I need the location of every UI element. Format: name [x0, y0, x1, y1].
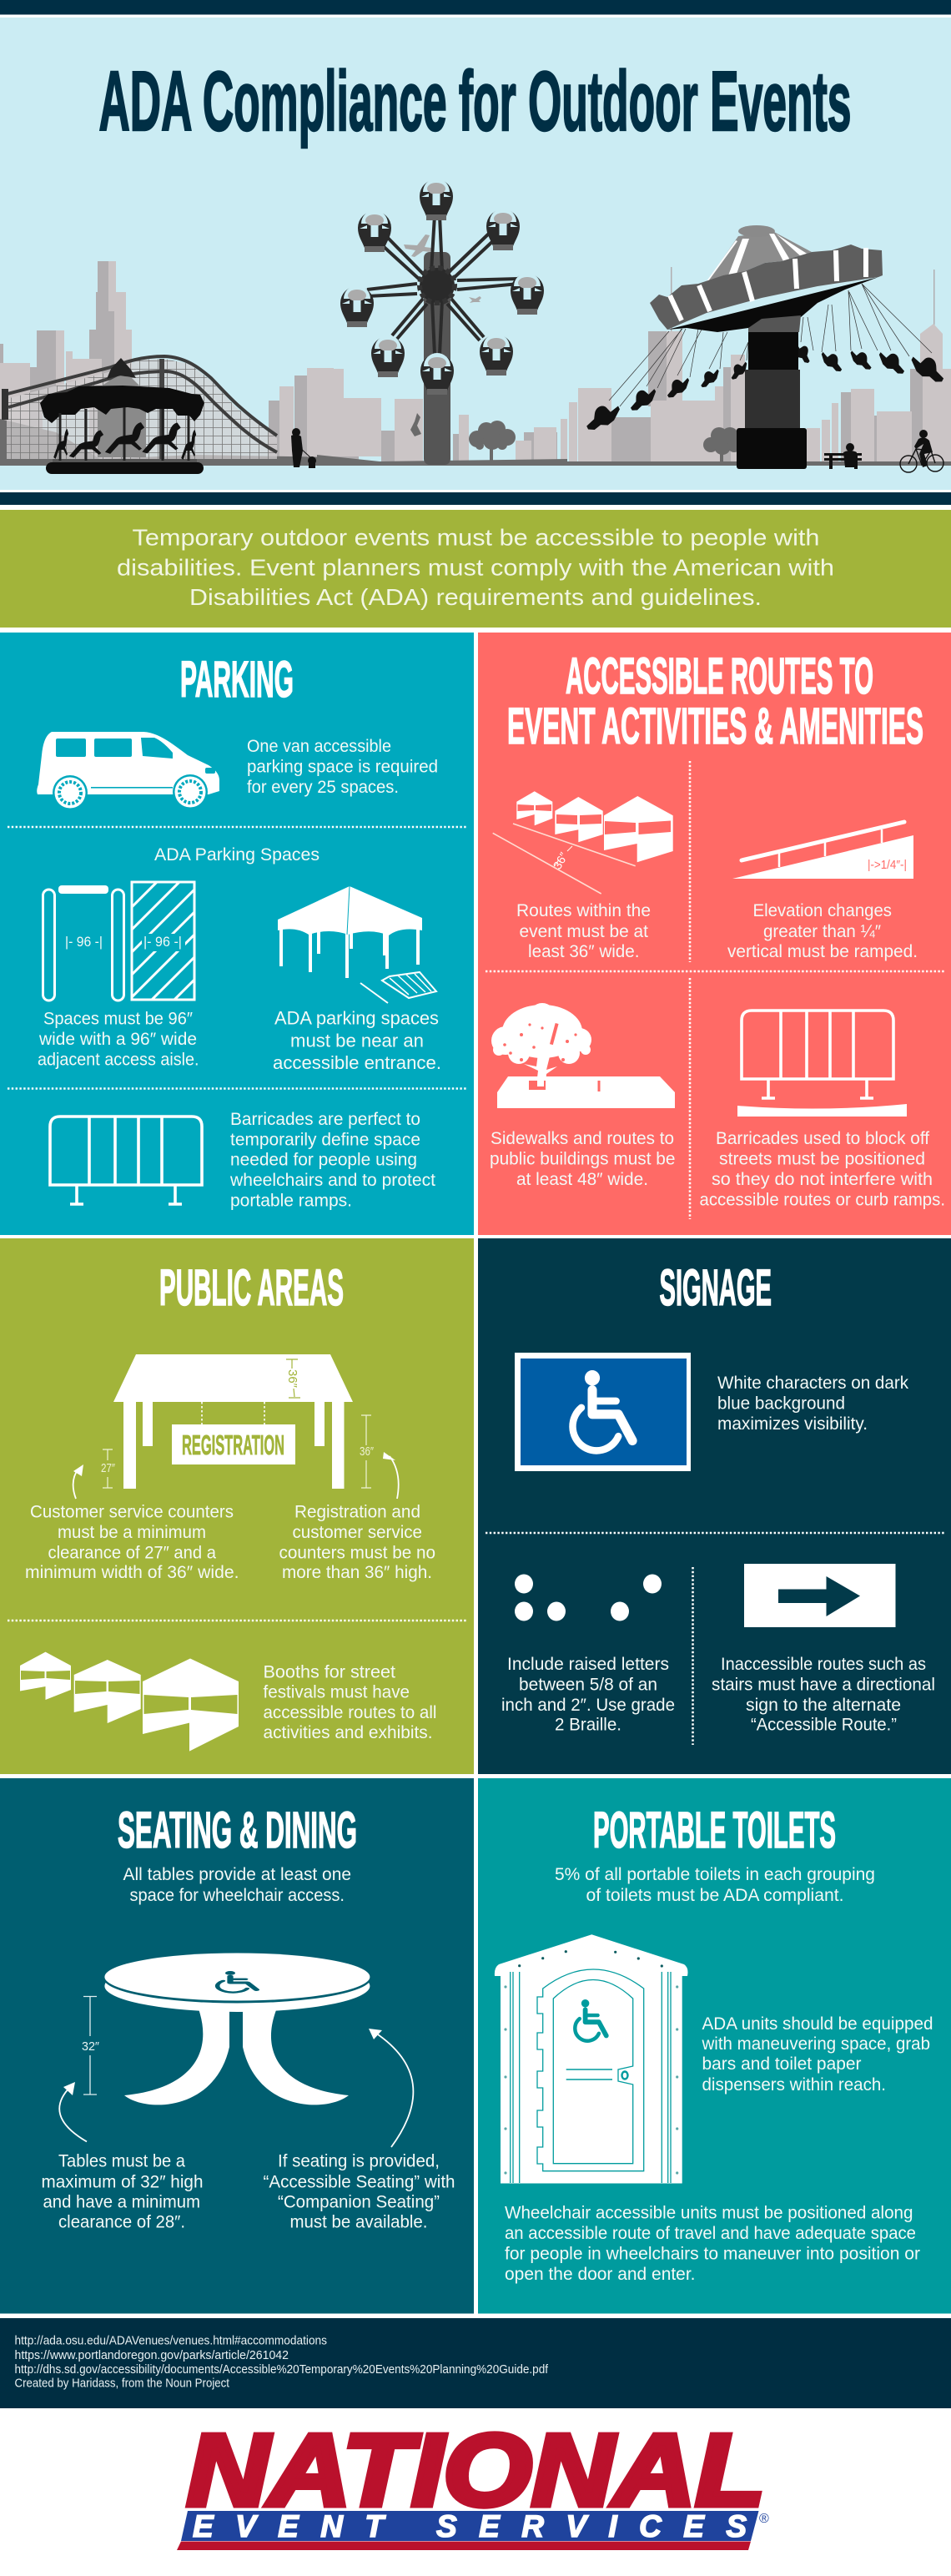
text: inaccessible routes: stairs must have a directional — [712, 1676, 935, 1694]
arrow: table height — [59, 2082, 87, 2141]
icon: portable toilet — [495, 1934, 687, 2183]
text: spaces width — [38, 1010, 199, 1070]
text: source links: http://dhs.sd.gov/accessibility/documents/Accessible%20Temporary%20Events%20Planning%20Guide.pdf — [15, 2363, 549, 2377]
text: accessible seating: “Companion Seating” — [278, 2193, 440, 2211]
text: wheelchair accessible units: open the door and enter. — [505, 2265, 696, 2284]
text: accessible seating: If seating is provided, — [278, 2151, 440, 2171]
text: raised letters: between 5/8 of an — [519, 1676, 657, 1694]
icon: parking space diagram — [42, 881, 195, 1001]
text: table height: clearance of 28″. — [58, 2213, 185, 2231]
icon: tents on route: 36″ — [551, 850, 571, 871]
plane silhouettes — [404, 234, 481, 303]
text: source links: http://ada.osu.edu/ADAVenues/venues.html#accommodations — [15, 2335, 327, 2348]
ferris wheel ride — [340, 179, 544, 465]
icon: registration counter: 36″ — [285, 1369, 299, 1389]
icon: registration counter: 36″ — [360, 1444, 375, 1459]
panel: public areas: PUBLIC AREAS — [159, 1259, 344, 1316]
panel: seating and dining — [0, 1778, 474, 2313]
icon: braille dots — [515, 1574, 662, 1621]
text: registration counters: Registration and — [294, 1502, 420, 1522]
text: inaccessible routes: “Accessible Route.” — [751, 1716, 897, 1734]
panel: parking — [0, 633, 474, 1235]
text: table height: Tables must be a — [58, 2151, 185, 2171]
text: ada units — [702, 2014, 933, 2095]
icon: barricade on curb — [737, 1011, 907, 1117]
text: ada units: bars and toilet paper — [702, 2054, 861, 2074]
icon: accessible parking sign — [515, 1353, 691, 1471]
text: spaces width: wide with a 96″ wide — [38, 1030, 197, 1049]
text: near entrance: must be near an — [290, 1030, 424, 1051]
panel: signage: SIGNAGE — [659, 1259, 772, 1316]
text: barricades block streets: Barricades used to block off — [716, 1129, 929, 1148]
text: elevation: greater than ¼″ — [763, 922, 882, 941]
person on bench — [824, 443, 862, 469]
icon: round table — [103, 1953, 370, 2105]
icon: ramp — [732, 822, 913, 879]
text: booths: activities and exhibits. — [264, 1723, 432, 1742]
text: accessible seating — [264, 2151, 455, 2231]
text: customer counters: must be a minimum — [58, 1523, 206, 1542]
text: inaccessible routes: sign to the alternate — [746, 1696, 901, 1715]
navy divider bar — [0, 492, 951, 505]
panel: sources footer — [0, 2318, 951, 2408]
panel: intro — [0, 510, 951, 628]
text: wheelchair access: space for wheelchair access. — [130, 1886, 345, 1905]
text: sidewalks: at least 48″ wide. — [516, 1170, 648, 1189]
icon: ramp: |->1/4″-| — [868, 858, 907, 872]
text: registration counters: customer service — [292, 1523, 422, 1542]
panel: hero sky scene — [0, 18, 951, 490]
logo: national event services: EVENT SERVICES — [193, 2509, 747, 2543]
carousel — [40, 358, 204, 474]
text: barricades block streets: streets must be positioned — [719, 1150, 925, 1168]
dimension: 32 inch: 32″ — [82, 2039, 100, 2054]
logo: national event services: NATIONAL — [187, 2413, 765, 2527]
text: routes width: Routes within the — [516, 901, 651, 920]
icon: tents on route — [493, 791, 673, 894]
intro text: disabilities. Event planners must comply with the American with — [117, 554, 834, 581]
text: elevation: vertical must be ramped. — [727, 942, 918, 961]
icon: barricade — [50, 1117, 202, 1204]
text: customer counters: clearance of 27″ and a — [48, 1544, 216, 1562]
panel: public areas — [0, 1238, 474, 1774]
text: barricades: temporarily define space — [230, 1130, 420, 1150]
text: five percent: of toilets must be ADA compliant. — [586, 1886, 844, 1905]
swing carousel — [583, 225, 948, 469]
logo: national event services: ® — [759, 2512, 769, 2526]
panel: parking: PARKING — [180, 651, 294, 708]
text: wheelchair access — [123, 1865, 351, 1905]
text: customer counters — [25, 1502, 239, 1582]
panel: accessible routes — [478, 633, 951, 1235]
text: ada units: ADA units should be equipped — [702, 2014, 933, 2034]
intro text — [117, 524, 834, 610]
text: raised letters: Include raised letters — [507, 1655, 669, 1674]
text: wheelchair accessible units: Wheelchair accessible units must be positioned along — [505, 2203, 913, 2223]
text: inaccessible routes: Inaccessible routes such as — [721, 1655, 926, 1674]
text: sidewalks: public buildings must be — [490, 1150, 676, 1168]
text: routes width — [516, 901, 651, 961]
text: registration counters: more than 36″ high. — [282, 1563, 432, 1582]
icon: registration counter — [101, 1354, 375, 1489]
text: raised letters: 2 Braille. — [555, 1716, 621, 1734]
text: five percent: 5% of all portable toilets in each grouping — [555, 1865, 875, 1884]
cyclist — [900, 430, 943, 472]
panel: portable toilets — [478, 1778, 951, 2313]
text: van space — [247, 737, 438, 797]
text: barricades block streets — [699, 1129, 945, 1210]
icon: registration counter: REGISTRATION — [182, 1429, 284, 1460]
text: customer counters: minimum width of 36″ wide. — [25, 1563, 239, 1582]
text: near entrance: ADA parking spaces — [274, 1008, 439, 1028]
text: table height — [42, 2151, 204, 2231]
text: ada units: dispensers within reach. — [702, 2075, 886, 2095]
text: raised letters — [501, 1655, 675, 1734]
top navy bar — [0, 0, 951, 15]
intro text: Disabilities Act (ADA) requirements and guidelines. — [189, 584, 762, 610]
roller coaster — [2, 356, 277, 463]
text: barricades — [229, 1110, 435, 1210]
panel: signage — [478, 1238, 951, 1774]
text: barricades block streets: so they do not interfere with — [712, 1170, 933, 1189]
trees — [410, 413, 741, 463]
subheading: ada parking spaces: ADA Parking Spaces — [154, 845, 320, 865]
icon: tree on sidewalk — [491, 1003, 675, 1108]
text: inaccessible routes — [712, 1655, 935, 1734]
text: visibility: White characters on dark — [717, 1374, 908, 1393]
icon: parking space diagram: |- 96 -| — [65, 934, 103, 950]
text: registration counters — [279, 1502, 435, 1582]
text: source links: Created by Haridass, from the Noun Project — [15, 2377, 229, 2390]
text: routes width: event must be at — [519, 922, 648, 941]
text: visibility: maximizes visibility. — [717, 1414, 868, 1434]
text: wheelchair access: All tables provide at least one — [123, 1865, 351, 1884]
text: barricades: wheelchairs and to protect — [229, 1171, 435, 1190]
text: elevation — [727, 901, 918, 961]
text: barricades block streets: accessible routes or curb ramps. — [699, 1190, 945, 1210]
skyline background buildings — [0, 261, 951, 466]
text: barricades: needed for people using — [230, 1150, 417, 1170]
text: elevation: Elevation changes — [752, 901, 892, 920]
text: wheelchair accessible units: an accessible route of travel and have adequate space — [505, 2224, 916, 2243]
icon: tent with ramp — [278, 886, 436, 1003]
text: visibility — [717, 1374, 908, 1434]
text: barricades: Barricades are perfect to — [230, 1110, 420, 1129]
person walking dog — [291, 428, 316, 468]
text: sidewalks — [490, 1129, 676, 1189]
heading: seating and dining: SEATING & DINING — [118, 1802, 357, 1858]
text: spaces width: adjacent access aisle. — [38, 1050, 199, 1070]
text: van space: parking space is required — [247, 758, 438, 776]
text: source links: https://www.portlandoregon.gov/parks/article/261042 — [15, 2349, 289, 2362]
text: near entrance: accessible entrance. — [273, 1052, 441, 1073]
text: booths — [264, 1662, 437, 1742]
text: booths: accessible routes to all — [264, 1703, 437, 1722]
text: booths: Booths for street — [264, 1662, 395, 1682]
icon: parking space diagram: |- 96 -| — [143, 934, 182, 950]
text: source links — [15, 2335, 549, 2390]
icon: accessible van — [37, 732, 219, 810]
text: ada units: with maneuvering space, grab — [702, 2034, 930, 2054]
text: table height: and have a minimum — [43, 2193, 200, 2211]
text: sidewalks: Sidewalks and routes to — [491, 1129, 674, 1148]
icon: booths — [20, 1652, 239, 1752]
text: accessible seating: “Accessible Seating” with — [264, 2173, 455, 2191]
text: accessible seating: must be available. — [290, 2213, 427, 2231]
intro text: Temporary outdoor events must be accessible to people with — [132, 524, 820, 551]
text: customer counters: Customer service counters — [30, 1502, 234, 1522]
text: van space: for every 25 spaces. — [247, 778, 399, 797]
text: spaces width: Spaces must be 96″ — [43, 1010, 194, 1028]
ground strips — [0, 419, 951, 466]
text: table height: maximum of 32″ high — [42, 2173, 204, 2191]
dimension: 32 inch — [82, 1996, 100, 2095]
icon: directional sign — [744, 1564, 896, 1627]
heading: accessible routes — [507, 648, 923, 754]
text: registration counters: counters must be no — [279, 1544, 435, 1562]
text: visibility: blue background — [717, 1394, 845, 1414]
icon: registration counter: 27″ — [101, 1461, 116, 1475]
text: five percent — [555, 1865, 875, 1905]
arrow: counter clearance — [73, 1464, 83, 1499]
arrow: counter height — [383, 1452, 399, 1499]
arrow: accessible seating — [369, 2029, 413, 2147]
text: barricades: portable ramps. — [230, 1192, 352, 1210]
text: wheelchair accessible units — [505, 2203, 920, 2284]
text: wheelchair accessible units: for people in wheelchairs to maneuver into position or — [505, 2245, 920, 2263]
text: van space: One van accessible — [247, 737, 391, 756]
text: near entrance — [273, 1008, 441, 1073]
text: raised letters: inch and 2″. Use grade — [501, 1696, 675, 1715]
text: routes width: least 36″ wide. — [528, 942, 639, 961]
text: booths: festivals must have — [264, 1682, 410, 1702]
